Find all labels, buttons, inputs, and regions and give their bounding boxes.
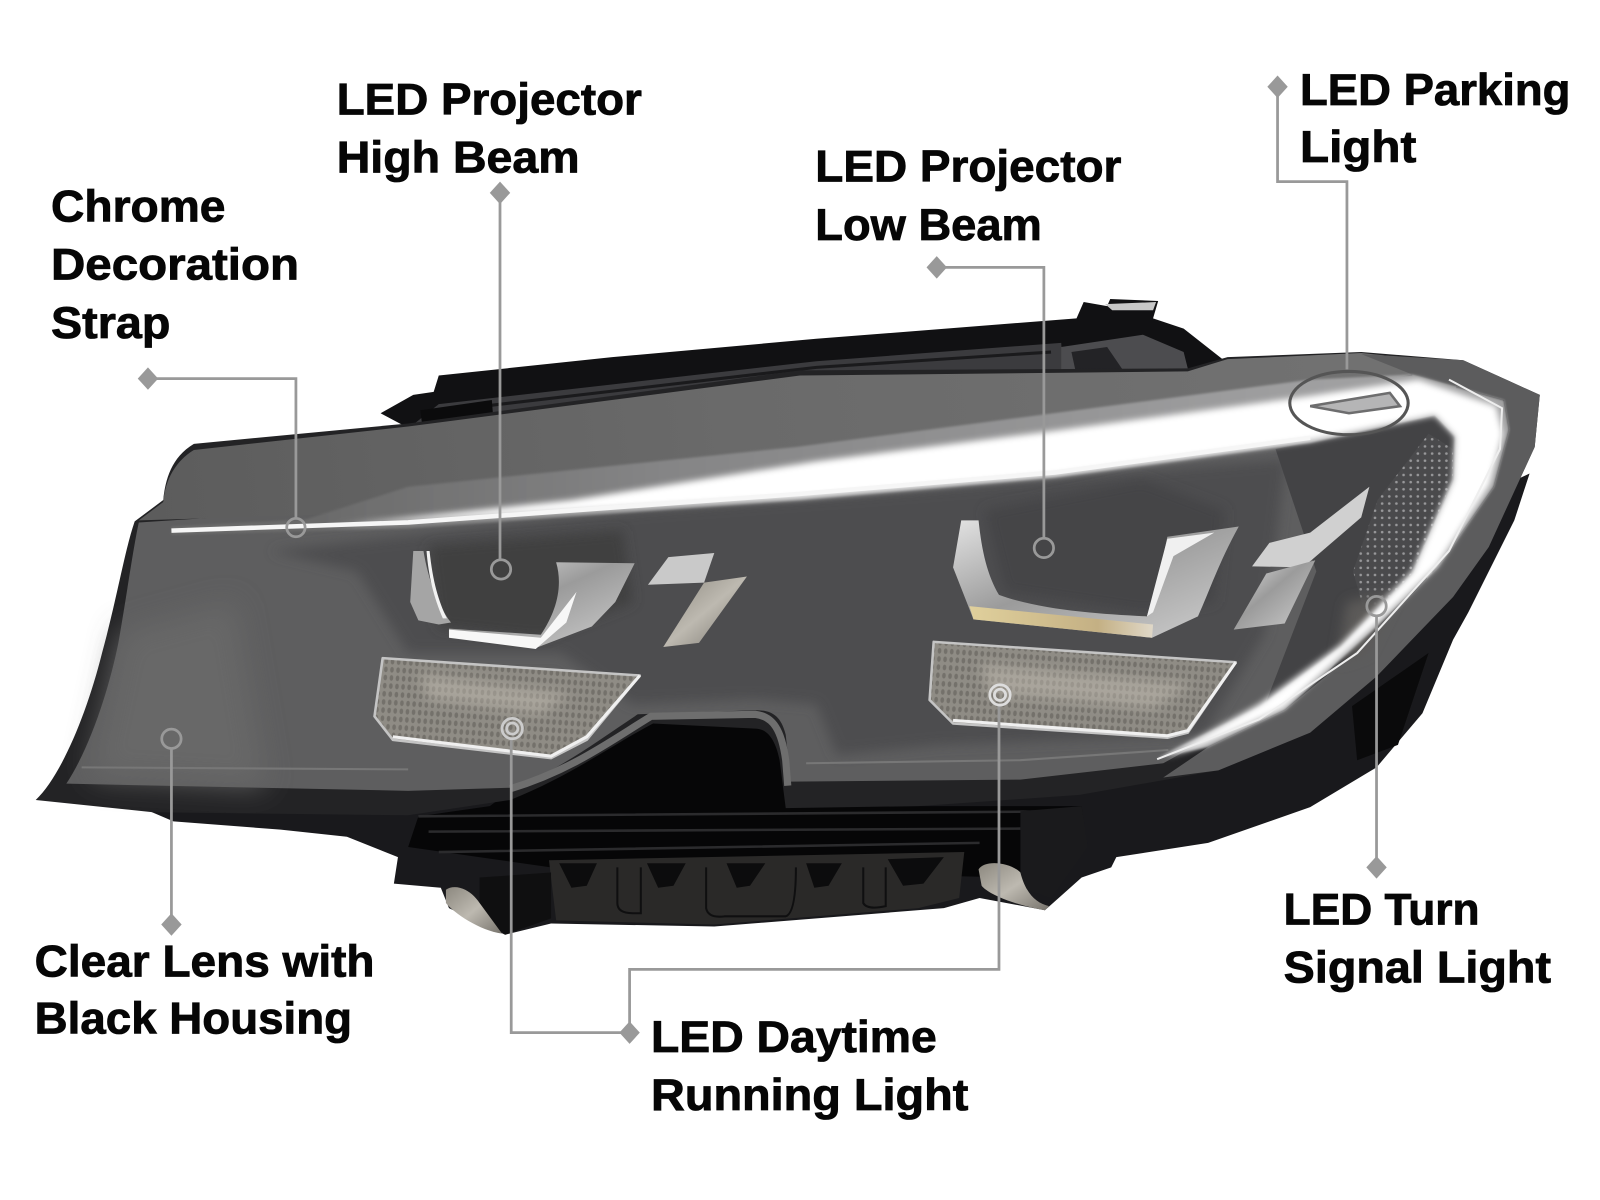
low beam projector trim [953,520,1239,638]
label: LED Projector High Beam [337,73,642,182]
label: Clear Lens with Black Housing: Black Housing [35,993,352,1044]
callout: LED Projector Low Beam [815,141,1121,558]
label: LED Parking Light: LED Parking [1300,64,1570,115]
label: Chrome Decoration Strap: Decoration [51,239,299,290]
label: LED Turn Signal Light [1284,883,1551,993]
callout: Clear Lens with Black Housing [35,729,374,1044]
leader: high beam [490,182,511,579]
clear lens body [66,408,1455,791]
label: Chrome Decoration Strap [51,180,299,348]
label: LED Projector Low Beam: Low Beam [815,199,1042,250]
label: LED Parking Light [1300,64,1570,172]
callout: LED Turn Signal Light [1284,596,1551,993]
callout: LED Daytime Running Light [502,685,1010,1120]
leader: clear lens [161,729,182,936]
headlight illustration [36,299,1540,935]
turn signal mesh [1265,415,1456,704]
label: LED Daytime Running Light: Running Light [651,1069,968,1120]
chrome decoration strap [171,374,1509,759]
upper lens band [139,353,1540,778]
leader: chrome strap [138,367,305,537]
parking light lens [1310,393,1400,413]
callout: LED Projector High Beam [337,73,642,579]
rear top housing [381,299,1222,439]
leader: daytime running light [502,685,1010,1044]
label: LED Projector Low Beam [815,141,1121,250]
label: LED Daytime Running Light: LED Daytime [651,1011,937,1062]
high beam projector trim [410,551,635,649]
label: Clear Lens with Black Housing: Clear Lens with [35,936,374,987]
label: LED Projector High Beam: High Beam [337,131,580,182]
callout: LED Parking Light [1267,64,1570,435]
leader: low beam [927,256,1054,558]
label: Clear Lens with Black Housing [35,936,374,1044]
label: Chrome Decoration Strap: Strap [51,297,170,348]
low beam side blades [1234,487,1369,630]
outer bezel [36,352,1540,815]
daytime running light left [374,658,640,758]
label: LED Turn Signal Light: Signal Light [1284,942,1551,993]
lower housing and mounting tabs [138,473,1530,935]
leader: turn signal [1366,596,1387,879]
callout: Chrome Decoration Strap [51,180,305,537]
label: LED Turn Signal Light: LED Turn [1284,883,1480,934]
high beam side blade [648,553,747,647]
label: LED Daytime Running Light [651,1011,968,1120]
leader: parking light [1267,76,1408,435]
label: LED Projector Low Beam: LED Projector [815,141,1121,192]
label: Chrome Decoration Strap: Chrome [51,180,226,231]
label: LED Projector High Beam: LED Projector [337,73,642,124]
daytime running light right [930,642,1236,738]
label: LED Parking Light: Light [1300,121,1416,172]
